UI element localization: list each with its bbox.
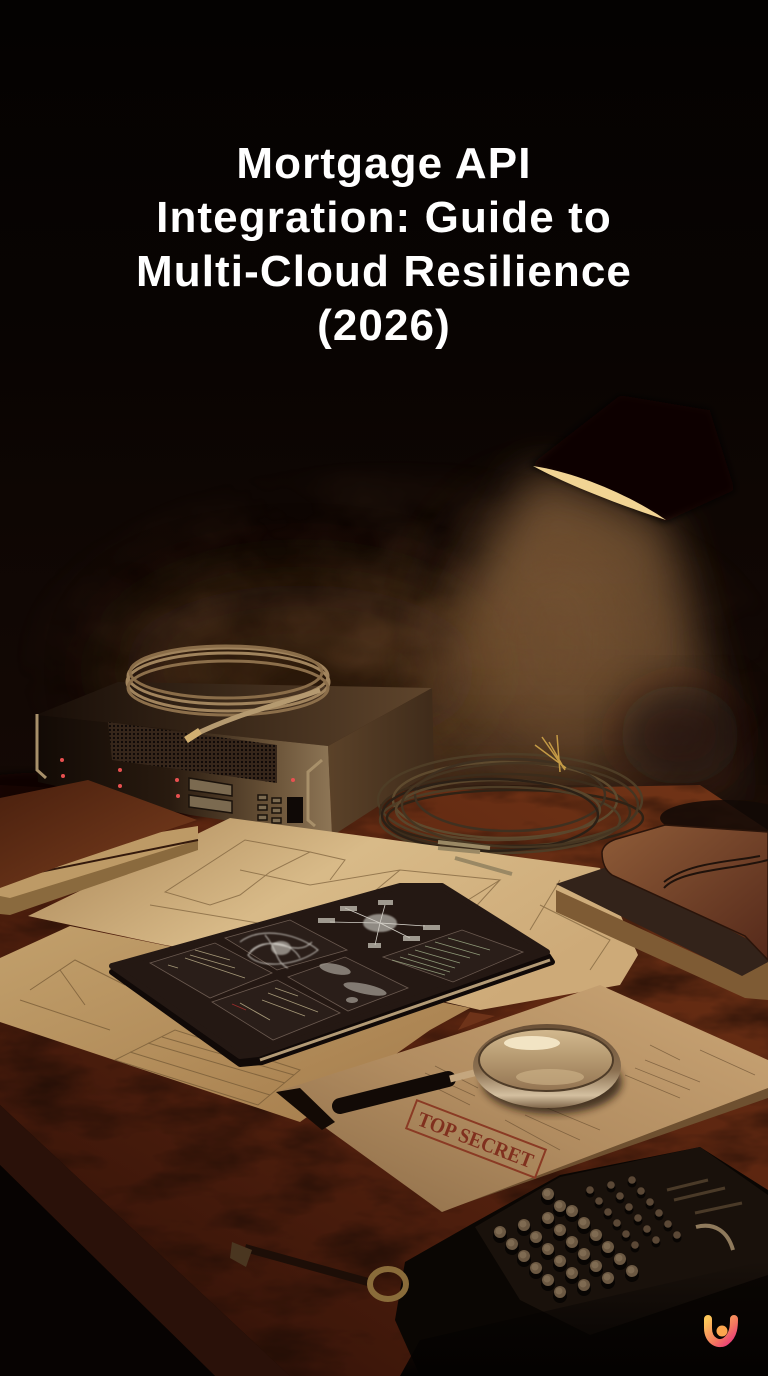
logo [708,1319,734,1343]
machine levers [667,1180,742,1250]
desk front edge [0,1105,290,1376]
key [230,1242,406,1299]
magnifying glass [340,1024,622,1114]
screen map [318,961,388,1003]
document text [420,1045,755,1150]
left books [0,780,198,915]
blueprint paper front [0,926,470,1122]
title: Multi-Cloud Resilience [136,247,632,296]
server [36,682,434,836]
server top [36,682,432,746]
title: Mortgage API [236,139,532,188]
shadow under desk [0,1165,215,1376]
server front [36,715,332,836]
stamp: top secret: TOP SECRET [414,1107,537,1173]
handles [37,714,322,826]
machine keys [493,1188,639,1303]
cable plugs [438,842,512,874]
light cone and haze [84,451,751,800]
background wall [0,0,768,1000]
tablet [112,886,552,1064]
folder [276,985,768,1212]
cipher machine [395,1147,768,1376]
lower book pages [556,890,768,1000]
cable coil on desk [378,735,643,853]
server vent mesh [108,722,277,783]
desk [0,772,768,1376]
screen text [168,938,490,1020]
cable coil on server [127,646,329,740]
desk gap [458,1012,495,1030]
title [136,139,632,350]
lamp [530,395,735,522]
upper book [602,825,768,960]
right books [556,825,768,1000]
blueprint paper back [28,818,638,1010]
status lights [60,758,295,798]
title: (2026) [317,301,451,350]
illustration: desk scene [0,396,768,1376]
power socket [287,797,303,823]
machine small keys [586,1176,682,1252]
lower book cover [556,866,768,976]
drive bays [189,778,281,823]
floor plan lines [150,840,610,970]
screen network diagrams [240,900,440,968]
bottom shadow [400,1260,768,1376]
title: Integration: Guide to [156,193,612,242]
plan and title block lines [20,960,300,1105]
server side [328,688,434,836]
screen panels [150,920,523,1040]
